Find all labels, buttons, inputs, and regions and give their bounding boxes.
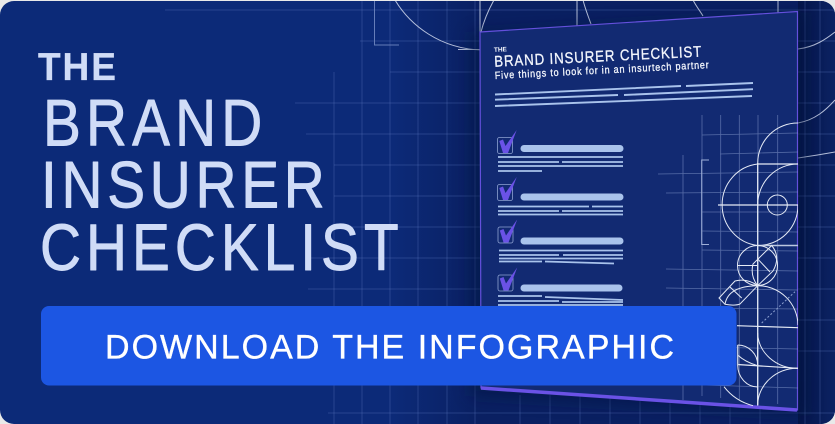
heading line: BRAND: BRAND [43, 87, 262, 161]
document shadow [470, 12, 806, 416]
heading line: INSURER: INSURER [41, 149, 325, 223]
heading [38, 46, 399, 285]
download button [41, 306, 736, 386]
document title [494, 46, 709, 80]
document blueprint artwork [658, 115, 798, 406]
small THE: THE [494, 46, 508, 54]
intro text lines [495, 83, 753, 106]
heading line: THE: THE [38, 46, 116, 89]
document subtitle: Five things to look for in an insurtech partner [495, 60, 710, 82]
document border [480, 12, 798, 410]
checklist document [480, 12, 798, 410]
checklist item 2 [498, 177, 623, 214]
document heading: BRAND INSURER CHECKLIST [494, 44, 702, 71]
checklist item 4 [498, 268, 623, 305]
checklist item 1 [498, 130, 623, 171]
heading line: CHECKLIST: CHECKLIST [40, 211, 399, 285]
button label: DOWNLOAD THE INFOGRAPHIC [105, 328, 674, 366]
background blueprint lines [374, 0, 835, 158]
checklist item 3 [498, 220, 623, 264]
